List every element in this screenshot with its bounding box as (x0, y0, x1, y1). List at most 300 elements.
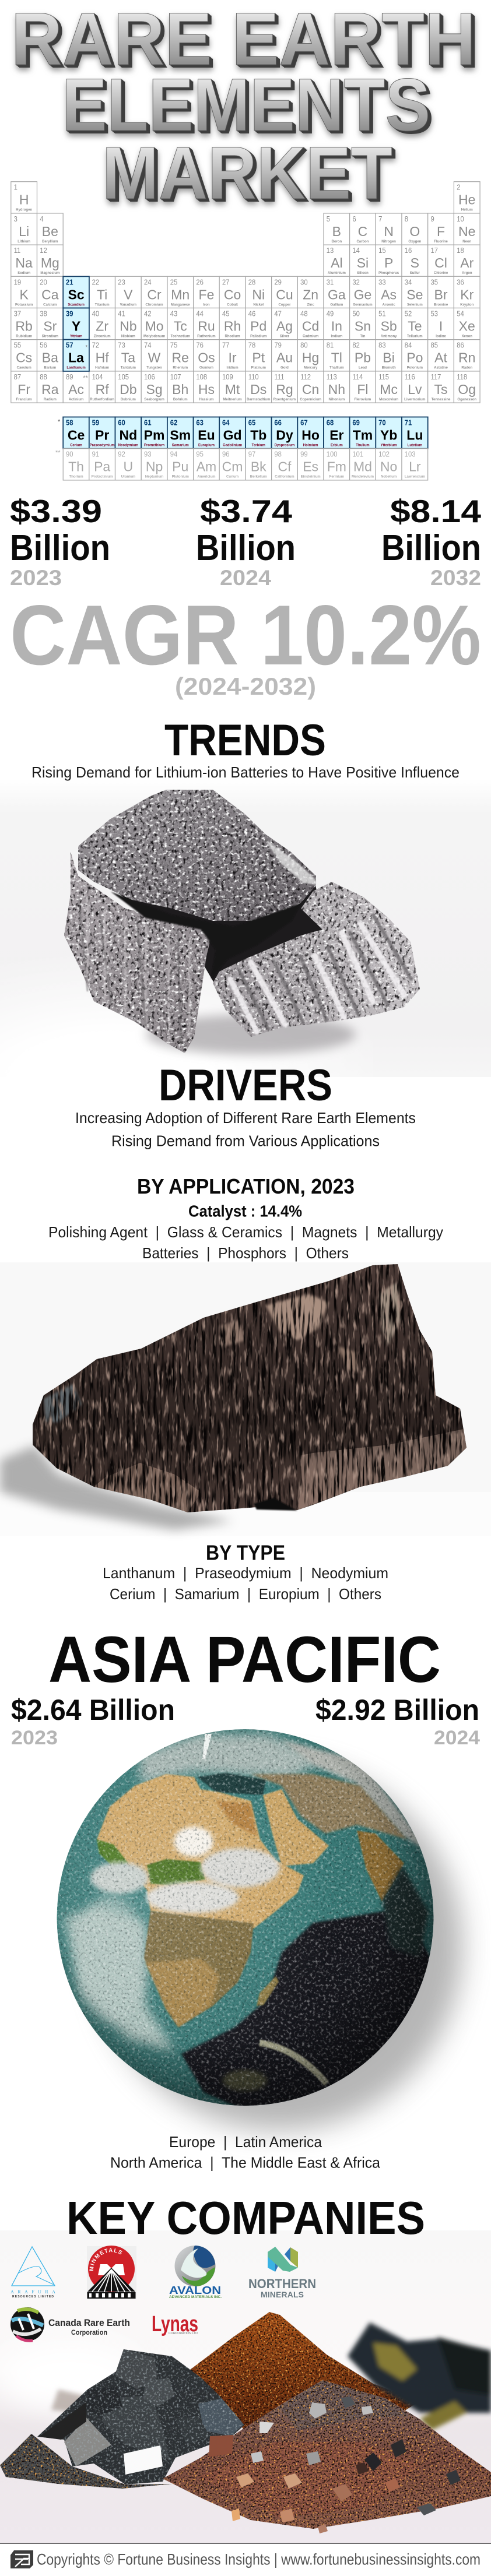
periodic table main grid: Boron (332, 240, 342, 244)
market value 2032: 2032 (430, 566, 481, 590)
periodic table main grid: As (381, 287, 397, 302)
periodic table main grid: 105 (118, 372, 129, 381)
periodic table main grid: Ruthenium (197, 335, 216, 338)
market value 2023 (10, 493, 110, 590)
highlighted rare earth cells: Sc (68, 287, 85, 302)
actinide row: 101 (352, 450, 364, 459)
actinide row: U (124, 459, 133, 474)
periodic table main grid: ** (83, 375, 88, 382)
periodic table main grid: Argon (462, 272, 472, 275)
periodic table main grid: 82 (352, 341, 360, 350)
periodic table main grid: 117 (431, 372, 441, 381)
periodic table main grid: 48 (300, 309, 308, 318)
periodic table main grid: Niobium (121, 335, 135, 338)
periodic table main grid: Sb (381, 318, 397, 333)
periodic table main grid: 77 (222, 341, 230, 350)
periodic table main grid: Ne (458, 224, 475, 239)
lanthanide row: Nd (120, 428, 137, 443)
periodic table main grid: 3 (14, 214, 17, 223)
logo: Northern Minerals: NORTHERN (248, 2276, 316, 2291)
actinide row: Thorium (69, 476, 83, 479)
periodic table main grid: 38 (40, 309, 47, 318)
market value 2024 (196, 493, 296, 590)
lanthanide row: Thulium (356, 444, 370, 448)
periodic table main grid: Molybdenum (143, 335, 165, 338)
periodic table main grid: 11 (14, 247, 21, 255)
periodic table main grid: 10 (457, 214, 464, 223)
actinide row: 94 (170, 450, 178, 459)
periodic table main grid: Magnesium (40, 272, 59, 275)
periodic table main grid: 20 (40, 278, 47, 286)
periodic table main grid: Carbon (356, 240, 369, 244)
lanthanide row: Gd (223, 428, 242, 443)
title: MARKET (102, 132, 392, 215)
periodic table main grid: Zn (303, 287, 318, 302)
periodic table main grid: 86 (457, 341, 464, 350)
lanthanide row: 61 (144, 418, 152, 427)
periodic table main grid: Br (434, 287, 448, 302)
copper ore gravel (163, 2380, 491, 2529)
periodic table main grid: Technetium (171, 335, 190, 338)
logo: Northern Minerals (248, 2247, 316, 2299)
periodic table main grid: 80 (300, 341, 308, 350)
periodic table main grid: 12 (40, 247, 47, 255)
periodic table main grid: K (19, 287, 29, 302)
footer (0, 2543, 491, 2576)
highlighted rare earth cells: 21 (66, 278, 73, 286)
periodic table main grid: 4 (40, 214, 44, 223)
lanthanide row: 68 (327, 418, 334, 427)
periodic table main grid: 53 (431, 309, 438, 318)
periodic table main grid: Gallium (330, 303, 343, 307)
periodic table main grid: Moscovium (379, 398, 398, 402)
lanthanide row: Ytterbium (381, 444, 397, 448)
periodic table main grid: Lv (408, 382, 422, 397)
copper ore crystals (209, 2396, 461, 2533)
periodic table main grid: Sulfur (410, 272, 420, 275)
periodic table main grid: 79 (274, 341, 282, 350)
periodic table main grid: 88 (40, 372, 47, 381)
periodic table main grid: 6 (352, 214, 356, 223)
periodic table main grid: 108 (196, 372, 208, 381)
actinide row (55, 449, 428, 480)
periodic table main grid: S (411, 255, 419, 270)
actinide row: Einsteinium (301, 476, 321, 479)
periodic table main grid: 27 (222, 278, 230, 286)
periodic table main grid: Barium (44, 367, 56, 370)
actinide row: Pa (94, 459, 110, 474)
periodic table main grid: Astatine (434, 367, 448, 370)
highlighted rare earth cells: Scandium (68, 303, 85, 307)
region list (110, 2133, 381, 2172)
periodic table main grid: Cs (16, 350, 32, 365)
lanthanide row: Tb (250, 428, 266, 443)
CAGR period: (2024-2032) (175, 673, 316, 700)
periodic table main grid: Antimony (381, 335, 397, 338)
actinide row: Lr (409, 459, 421, 474)
actinide row: 90 (66, 450, 73, 459)
periodic table main grid: 75 (170, 341, 178, 350)
periodic table main grid: Calcium (43, 303, 57, 307)
logo: Canada Rare Earth: Corporation (71, 2328, 107, 2336)
periodic table main grid: 2 (457, 183, 460, 192)
periodic table main grid: Ru (198, 318, 215, 333)
actinide row: Cf (278, 459, 292, 474)
actinide row: ** (55, 449, 61, 456)
periodic table main grid (11, 182, 480, 403)
periodic table main grid: Rn (458, 350, 475, 365)
periodic table main grid: 8 (405, 214, 408, 223)
periodic table main grid: Si (357, 255, 369, 270)
application list: Batteries | Phosphors | Others (142, 1244, 349, 1262)
actinide row: Uranium (121, 476, 135, 479)
lanthanide row: Praseodymium (90, 444, 115, 448)
logo: Minmetals (87, 2246, 136, 2299)
periodic table main grid: Se (406, 287, 423, 302)
periodic table main grid: Be (42, 224, 58, 239)
periodic table main grid: At (434, 350, 448, 365)
periodic table main grid: Hassium (199, 398, 213, 402)
periodic table main grid: Re (172, 350, 189, 365)
periodic table main grid: 89 (66, 372, 73, 381)
lanthanide row: 59 (92, 418, 99, 427)
periodic table main grid: 22 (92, 278, 99, 286)
actinide row: Protactinium (92, 476, 113, 479)
periodic table main grid: Cn (302, 382, 319, 397)
periodic table main grid: Ti (97, 287, 107, 302)
market value 2032: $8.14 (390, 493, 481, 529)
periodic table main grid: 7 (378, 214, 382, 223)
highlighted rare earth cells: Y (72, 318, 80, 333)
periodic table main grid: Copper (278, 303, 291, 307)
actinide row: 93 (144, 450, 152, 459)
periodic table main grid: Nickel (253, 303, 264, 307)
periodic table main grid: Tennessine (432, 398, 451, 402)
actinide row: Cm (222, 459, 243, 474)
periodic table main grid: Al (331, 255, 343, 270)
logo: Canada Rare Earth (10, 2307, 130, 2341)
lanthanide row: Sm (170, 428, 191, 443)
periodic table main grid: Caesium (17, 367, 31, 370)
periodic table main grid: Fl (357, 382, 369, 397)
periodic table main grid: Db (120, 382, 137, 397)
actinide row: Es (303, 459, 318, 474)
icon: Fortune Business Insights logo (10, 2550, 33, 2568)
periodic table main grid: 55 (14, 341, 21, 350)
periodic table main grid: Silicon (357, 272, 369, 275)
lanthanide row: Promethium (144, 444, 164, 448)
periodic table main grid: Ds (250, 382, 266, 397)
lanthanide row: 71 (405, 418, 412, 427)
periodic table main grid: Tin (360, 335, 366, 338)
periodic table main grid: Oganesson (457, 398, 476, 402)
periodic table main grid: 74 (144, 341, 152, 350)
periodic table main grid: Ba (42, 350, 58, 365)
periodic table main grid: Helium (461, 209, 473, 212)
lanthanide row: Pm (144, 428, 164, 443)
periodic table main grid: 118 (457, 372, 467, 381)
lanthanide row: Lutetium (408, 444, 422, 448)
heading: trends: TRENDS (164, 716, 326, 765)
periodic table main grid: Na (15, 255, 33, 270)
periodic table main grid: P (384, 255, 393, 270)
lanthanide row: Terbium (252, 444, 265, 448)
periodic table main grid: Li (19, 224, 29, 239)
periodic table main grid: 56 (40, 341, 47, 350)
periodic table main grid: Cd (302, 318, 319, 333)
periodic table main grid: 54 (457, 309, 464, 318)
type list (103, 1564, 388, 1603)
application list: Polishing Agent | Glass & Ceramics | Magnets | Metallurgy (48, 1223, 443, 1241)
logo: Avalon Advanced Materials (169, 2246, 222, 2299)
blurred dark rocks (51, 2322, 491, 2430)
regional value 2024: $2.92 Billion (315, 1694, 479, 1726)
periodic table main grid: 26 (196, 278, 204, 286)
periodic table main grid: Mt (225, 382, 240, 397)
periodic table main grid: 41 (118, 309, 125, 318)
heading: by application: BY APPLICATION, 2023 (137, 1174, 355, 1198)
periodic table main grid: 114 (352, 372, 363, 381)
periodic table main grid: B (332, 224, 341, 239)
periodic table main grid: Ts (434, 382, 448, 397)
heading: asia pacific: ASIA PACIFIC (48, 1623, 441, 1696)
lanthanide row: Lu (406, 428, 423, 443)
periodic table main grid: Platinum (251, 367, 266, 370)
actinide row: Th (68, 459, 84, 474)
lanthanide row: Eu (198, 428, 215, 443)
lanthanide row: Dy (276, 428, 293, 443)
actinide row: Md (353, 459, 372, 474)
periodic table main grid: Mn (171, 287, 190, 302)
periodic table main grid: Selenium (407, 303, 423, 307)
periodic table main grid: 15 (378, 247, 386, 255)
periodic table main grid: Cobalt (227, 303, 238, 307)
lanthanide row: Ho (301, 428, 320, 443)
actinide row: 98 (274, 450, 282, 459)
periodic table main grid: 87 (14, 372, 21, 381)
periodic table main grid: Rb (15, 318, 33, 333)
periodic table main grid: Palladium (250, 335, 266, 338)
periodic table main grid: Iron (203, 303, 210, 307)
periodic table main grid: Rhenium (173, 367, 188, 370)
periodic table main grid: 43 (170, 309, 178, 318)
periodic table main grid: Fe (199, 287, 214, 302)
periodic table main grid: 29 (274, 278, 282, 286)
periodic table main grid: Tl (331, 350, 342, 365)
periodic table main grid: 83 (378, 341, 386, 350)
market value 2024: $3.74 (200, 493, 292, 529)
globe (57, 1729, 443, 2113)
periodic table main grid: Phosphorus (378, 272, 399, 275)
periodic table main grid: 9 (431, 214, 434, 223)
lanthanide row: Yb (380, 428, 397, 443)
periodic table main grid: Mo (145, 318, 164, 333)
periodic table main grid: Hs (198, 382, 215, 397)
periodic table main grid: 37 (14, 309, 21, 318)
periodic table main grid: Beryllium (42, 240, 58, 244)
periodic table main grid: Indium (331, 335, 342, 338)
periodic table main grid: Iodine (436, 335, 447, 338)
periodic table main grid: Meitnerium (223, 398, 242, 402)
periodic table main grid: Bohrium (173, 398, 188, 402)
periodic table main grid: 84 (405, 341, 412, 350)
lanthanide row: 70 (378, 418, 386, 427)
lanthanide row: * (58, 418, 61, 425)
periodic table main grid: 1 (14, 183, 17, 192)
catalyst share: Catalyst : 14.4% (188, 1202, 302, 1220)
lanthanide row: 63 (196, 418, 204, 427)
periodic table main grid: 115 (378, 372, 389, 381)
actinide row: 103 (405, 450, 416, 459)
periodic table main grid: Fr (17, 382, 30, 397)
periodic table main grid: Rg (276, 382, 293, 397)
periodic table main grid: 17 (431, 247, 438, 255)
periodic table main grid: Oxygen (408, 240, 422, 244)
periodic table main grid: Xe (459, 318, 475, 333)
periodic table main grid: V (124, 287, 133, 302)
periodic table main grid: 28 (248, 278, 256, 286)
periodic table main grid: Seaborgium (144, 398, 164, 402)
actinide row: 102 (378, 450, 390, 459)
periodic table main grid: Radium (44, 398, 57, 402)
periodic table main grid: Ga (328, 287, 346, 302)
periodic table main grid: 106 (144, 372, 155, 381)
periodic table main grid: Hafnium (95, 367, 109, 370)
periodic table main grid: Darmstadtium (247, 398, 270, 402)
type list: Lanthanum | Praseodymium | Neodymium (103, 1564, 388, 1582)
lanthanide row: Samarium (172, 444, 189, 448)
periodic table main grid: Chlorine (434, 272, 448, 275)
periodic table main grid: Cu (276, 287, 293, 302)
trends text: Rising Demand for Lithium-ion Batteries to Have Positive Influence (31, 763, 460, 781)
periodic table main grid: 31 (327, 278, 334, 286)
heading: key companies: KEY COMPANIES (66, 2192, 425, 2244)
region list: Europe | Latin America (169, 2133, 322, 2151)
periodic table main grid: Sodium (17, 272, 30, 275)
periodic table main grid: 33 (378, 278, 386, 286)
periodic table main grid: 19 (14, 278, 21, 286)
highlighted rare earth cells: La (68, 350, 84, 365)
market value 2023: Billion (10, 528, 110, 568)
regional value 2024: 2024 (434, 1727, 480, 1749)
periodic table main grid: Germanium (353, 303, 373, 307)
drivers text (75, 1109, 416, 1149)
periodic table main grid: 116 (405, 372, 415, 381)
periodic table main grid: O (409, 224, 420, 239)
logo: Avalon Advanced Materials: AVALON (169, 2285, 221, 2296)
periodic table main grid: 32 (352, 278, 360, 286)
periodic table main grid: Lithium (17, 240, 30, 244)
actinide row: Np (146, 459, 163, 474)
periodic table main grid: 107 (170, 372, 181, 381)
photo: silver metal rock (0, 779, 491, 1077)
periodic table main grid: 49 (327, 309, 334, 318)
periodic table main grid: Hydrogen (16, 209, 32, 212)
periodic table main grid: C (358, 224, 367, 239)
actinide row: 96 (222, 450, 230, 459)
periodic table main grid: Nitrogen (381, 240, 396, 244)
logo: Arafura Resources: RESOURCES LIMITED (12, 2295, 54, 2299)
lanthanide row: Cerium (70, 444, 82, 448)
periodic table main grid: Pd (250, 318, 266, 333)
lanthanide row (58, 417, 428, 449)
periodic table main grid: Sr (43, 318, 57, 333)
lanthanide row: Er (329, 428, 344, 443)
heading: by type: BY TYPE (206, 1541, 285, 1565)
type list: Cerium | Samarium | Europium | Others (110, 1585, 381, 1603)
heading: drivers: DRIVERS (159, 1061, 332, 1110)
title (11, 0, 476, 215)
lanthanide row: 67 (300, 418, 308, 427)
highlighted rare earth cells: 39 (66, 309, 73, 318)
lanthanide row: Erbium (331, 444, 343, 448)
periodic table main grid: In (331, 318, 342, 333)
periodic table main grid: 104 (92, 372, 103, 381)
periodic table main grid: Osmium (199, 367, 213, 370)
logo: Lynas: Lynas (152, 2312, 198, 2336)
lanthanide row: 58 (66, 418, 73, 427)
periodic table main grid: Pt (252, 350, 265, 365)
periodic table main grid: Zinc (307, 303, 314, 307)
periodic table main grid: Lead (359, 367, 367, 370)
photo: rare earth minerals (0, 2230, 491, 2543)
periodic table main grid: Nh (328, 382, 345, 397)
periodic table main grid: Zirconium (94, 335, 111, 338)
periodic table main grid: 76 (196, 341, 204, 350)
drivers text: Rising Demand from Various Applications (111, 1132, 380, 1149)
market value 2032 (381, 493, 481, 590)
periodic table main grid: I (439, 318, 443, 333)
periodic table main grid: 30 (300, 278, 308, 286)
periodic table main grid: Potassium (15, 303, 33, 307)
periodic table main grid: Po (406, 350, 423, 365)
actinide row: Neptunium (145, 476, 163, 479)
periodic table main grid: 112 (300, 372, 311, 381)
periodic table main grid: 40 (92, 309, 99, 318)
periodic table main grid: Nihonium (329, 398, 345, 402)
periodic table main grid: Aluminium (328, 272, 346, 275)
periodic table main grid: Cl (434, 255, 447, 270)
logo: Minmetals: MINMETALS (89, 2248, 122, 2271)
actinide row: 97 (248, 450, 255, 459)
periodic table main grid: 47 (274, 309, 282, 318)
periodic table main grid: Radon (461, 367, 472, 370)
copper powder pile (188, 2312, 420, 2430)
regional value 2023: $2.64 Billion (11, 1694, 175, 1726)
periodic table main grid: Actinium (69, 398, 83, 402)
periodic table main grid: 16 (405, 247, 412, 255)
periodic table main grid: Ar (460, 255, 474, 270)
regional value 2023: 2023 (11, 1727, 58, 1749)
periodic table main grid: Hf (96, 350, 109, 365)
periodic table main grid: 72 (92, 341, 99, 350)
lanthanide row: 60 (118, 418, 125, 427)
periodic table main grid: 109 (222, 372, 233, 381)
periodic table main grid: Manganese (171, 303, 190, 307)
market value 2024: 2024 (220, 566, 271, 590)
periodic table main grid: Neon (462, 240, 472, 244)
periodic table main grid: Iridium (227, 367, 239, 370)
actinide row: 95 (196, 450, 204, 459)
periodic table main grid: Francium (16, 398, 32, 402)
actinide row: Mendelevium (352, 476, 374, 479)
actinide row: Pu (172, 459, 188, 474)
actinide row: Bk (251, 459, 266, 474)
lanthanide row: 66 (274, 418, 282, 427)
periodic table main grid: Cr (147, 287, 162, 302)
periodic table main grid: Rutherfordium (90, 398, 114, 402)
highlighted rare earth cells: Yttrium (70, 335, 82, 338)
